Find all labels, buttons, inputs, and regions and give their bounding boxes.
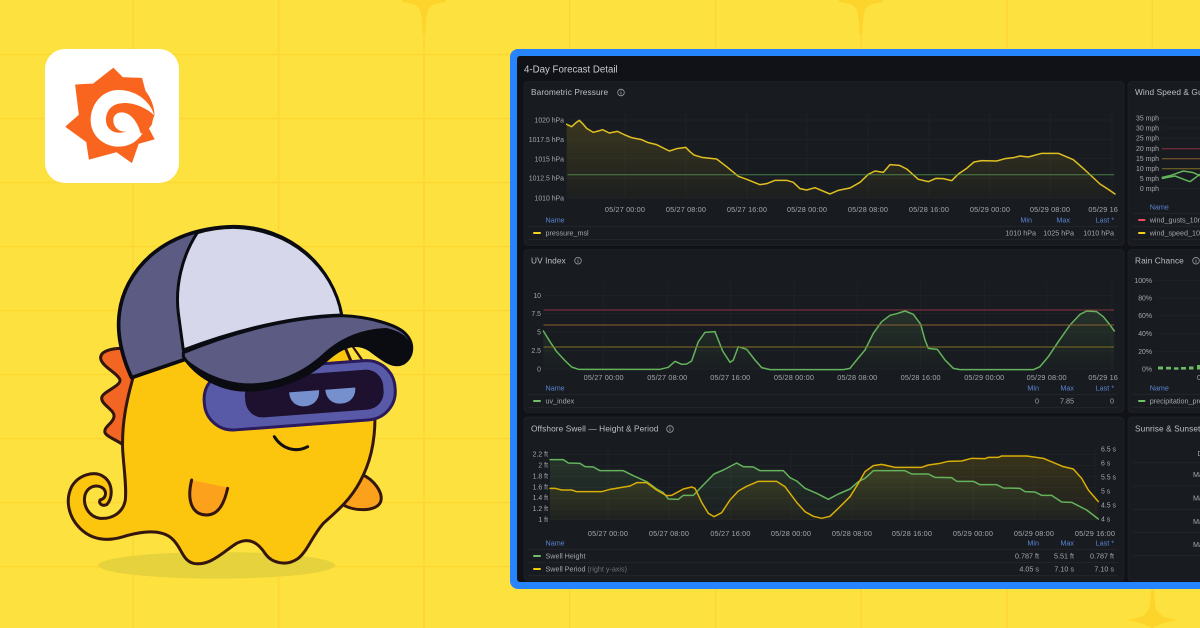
mascot fin	[343, 474, 381, 510]
panel: wind speed and gusts: 10 mph	[1136, 166, 1159, 173]
legend: swell: 0.787 ft	[1015, 552, 1039, 560]
panel: UV index: 5	[537, 330, 541, 336]
panel: rain chance: 60%	[1138, 313, 1152, 320]
legend: UV index: 0	[1110, 396, 1114, 406]
panel: offshore swell: 05/28 08:00	[832, 529, 872, 538]
panel: offshore swell: 2 ft	[538, 462, 548, 470]
panel: rain chance: 0%	[1142, 366, 1152, 374]
legend: pressure	[528, 216, 1118, 240]
panel: wind speed and gusts: 20 mph	[1136, 146, 1159, 153]
panel: barometric pressure: 05/27 08:00	[666, 205, 706, 214]
panel: offshore swell: 1.4 ft	[533, 495, 548, 502]
panel: UV index: UV Index	[531, 256, 567, 266]
panel: offshore swell: 1 ft	[538, 517, 548, 524]
panel: offshore swell: 1.2 ft	[533, 506, 548, 513]
panel: offshore swell: 05/27 00:00	[588, 529, 628, 538]
panel: offshore swell: 5.5 s	[1101, 474, 1116, 482]
panel: sunrise and sunset table	[1128, 417, 1200, 581]
legend: rain	[1133, 384, 1200, 408]
panel: rain chance: 20%	[1138, 349, 1152, 356]
panel: offshore swell: 05/29 00:00	[953, 529, 993, 538]
panel: UV index: 05/29 16	[1088, 373, 1118, 382]
legend: swell: Min	[1027, 538, 1039, 548]
legend: swell: 7.10 s	[1054, 564, 1074, 574]
panel: sunrise and sunset table: Sunrise & Sunset	[1135, 424, 1200, 434]
panel: UV index	[524, 250, 1124, 412]
panel: wind speed and gusts: 5 mph	[1140, 176, 1159, 183]
legend: UV index: Last *	[1096, 384, 1114, 392]
panel: wind speed and gusts: 25 mph	[1136, 136, 1159, 142]
legend: swell: 7.10 s	[1094, 564, 1114, 574]
legend: pressure: 1010 hPa	[1005, 228, 1036, 238]
panel: UV index: 0	[537, 366, 541, 374]
panel: barometric pressure: Barometric Pressure	[531, 87, 608, 97]
dashboard heading: 4-Day Forecast Detail	[524, 64, 618, 76]
mascot shadow	[98, 552, 335, 579]
panel: barometric pressure: 05/29 00:00	[970, 205, 1010, 214]
panel: wind speed and gusts: 30 mph	[1136, 126, 1159, 132]
panel: barometric pressure: 1017.5 hPa	[529, 137, 564, 144]
panel: barometric pressure: 05/28 08:00	[848, 205, 888, 214]
legend: rain: Name	[1150, 384, 1169, 392]
panel: offshore swell: Offshore Swell — Height & Period	[531, 424, 659, 434]
legend: UV index: Name	[546, 384, 565, 392]
panel: offshore swell: 1.8 ft	[533, 474, 548, 480]
panel: offshore swell: 6 s	[1101, 460, 1111, 468]
panel: UV index: 05/29 00:00	[964, 373, 1004, 382]
panel: offshore swell: 6.5 s	[1101, 446, 1116, 454]
dashboard window with blue frame	[510, 49, 1200, 589]
panel: offshore swell: 4 s	[1101, 516, 1111, 524]
legend: UV index: Max	[1060, 384, 1074, 392]
legend: pressure: Last *	[1096, 216, 1114, 224]
panel: offshore swell: 05/27 08:00	[649, 529, 689, 538]
panel: barometric pressure: 05/27 16:00	[727, 205, 767, 214]
icon: Grafana sun spiral	[66, 68, 154, 162]
panel: UV index: 05/28 00:00	[774, 373, 814, 382]
panel: UV index: 7.5	[531, 311, 541, 318]
chart: rain dashes	[1158, 365, 1200, 370]
panel: offshore swell: 05/28 16:00	[892, 529, 932, 538]
panel: UV index: 05/28 08:00	[837, 373, 877, 382]
panel: UV index: 2.5	[531, 348, 541, 355]
legend: swell: Swell Period (right y-axis)	[546, 564, 627, 574]
panel: UV index: 05/29 08:00	[1027, 373, 1067, 382]
legend: swell: Name	[546, 538, 565, 548]
mascot: yellow creature wearing a cap and visor	[68, 227, 412, 579]
legend: swell: 0.787 ft	[1090, 552, 1114, 560]
mascot crest	[101, 348, 133, 445]
panel: barometric pressure: 05/29 08:00	[1030, 205, 1070, 214]
Grafana logo tile	[45, 49, 179, 183]
legend: UV index: 0	[1035, 396, 1039, 406]
panel: barometric pressure: 05/29 16	[1088, 205, 1118, 214]
legend: UV index: uv_index	[546, 396, 575, 406]
panel: offshore swell: 05/27 16:00	[710, 529, 751, 538]
mascot smile	[274, 437, 308, 450]
panel: UV index: 05/27 08:00	[647, 373, 687, 382]
legend: pressure: Max	[1056, 216, 1070, 224]
legend: swell	[528, 538, 1118, 576]
panel: rain chance: 80%	[1138, 296, 1152, 302]
chart: UV index line with thresholds	[543, 310, 1114, 370]
legend: swell: Swell Height	[546, 552, 585, 560]
mascot eyes	[289, 390, 320, 407]
panel: offshore swell: 1.6 ft	[533, 484, 548, 492]
panel: UV index: 05/27 00:00	[584, 373, 624, 382]
panel: wind speed and gusts	[1128, 82, 1200, 246]
legend: UV index	[528, 384, 1118, 408]
legend: pressure: pressure_msl	[546, 228, 589, 238]
panel: UV index: 05/27 16:00	[710, 373, 750, 382]
panel: offshore swell: 5 s	[1101, 488, 1111, 496]
legend: pressure: 1010 hPa	[1083, 228, 1114, 238]
legend: wind	[1133, 202, 1200, 240]
panel: barometric pressure: 05/28 16:00	[909, 205, 949, 214]
panel: UV index: 05/28 16:00	[901, 373, 941, 382]
legend: UV index: Min	[1027, 384, 1039, 392]
chart: wind thresholds and series	[1162, 149, 1200, 182]
panel: barometric pressure: 05/28 00:00	[787, 205, 827, 214]
mascot cap	[119, 227, 412, 392]
panel: barometric pressure: 05/27 00:00	[605, 205, 645, 214]
panel: barometric pressure: 1015 hPa	[534, 156, 564, 163]
legend: pressure: Name	[546, 216, 565, 224]
legend: wind: Name	[1150, 202, 1169, 212]
panel: barometric pressure: 1010 hPa	[534, 195, 564, 202]
mascot wing	[190, 480, 228, 515]
legend: swell: Max	[1060, 538, 1074, 548]
panel: offshore swell: 2.2 ft	[533, 452, 548, 458]
mascot body and tail	[68, 343, 375, 564]
chart: pressure line	[567, 120, 1115, 198]
panel: wind speed and gusts: 35 mph	[1136, 116, 1159, 122]
panel: rain chance	[1128, 250, 1200, 412]
panel: barometric pressure	[524, 82, 1124, 246]
legend: swell: 4.05 s	[1019, 564, 1039, 574]
panel: UV index: 10	[533, 293, 541, 300]
panel: barometric pressure: 1020 hPa	[534, 118, 564, 124]
panel: offshore swell: 05/29 08:00	[1014, 529, 1054, 538]
panel: wind speed and gusts: 15 mph	[1136, 156, 1159, 163]
legend: swell: 5.51 ft	[1054, 552, 1074, 560]
legend: swell: Last *	[1096, 538, 1114, 548]
mascot visor	[202, 359, 397, 432]
panel: rain chance: Rain Chance	[1135, 256, 1184, 266]
legend: UV index: 7.85	[1060, 396, 1074, 406]
panel: wind speed and gusts: 0 mph	[1140, 186, 1159, 193]
chart: swell height and period lines	[550, 456, 1098, 520]
panel: offshore swell	[524, 417, 1124, 581]
panel: rain chance: 40%	[1138, 331, 1152, 338]
panel: offshore swell: 4.5 s	[1101, 502, 1116, 510]
panel: barometric pressure: 1012.5 hPa	[529, 176, 564, 183]
panel: rain chance: 100%	[1134, 278, 1152, 285]
legend: pressure: Min	[1020, 216, 1032, 224]
panel: offshore swell: 05/29 16:00	[1075, 529, 1115, 538]
legend: pressure: 1025 hPa	[1043, 228, 1074, 238]
panel: offshore swell: 05/28 00:00	[771, 529, 811, 538]
